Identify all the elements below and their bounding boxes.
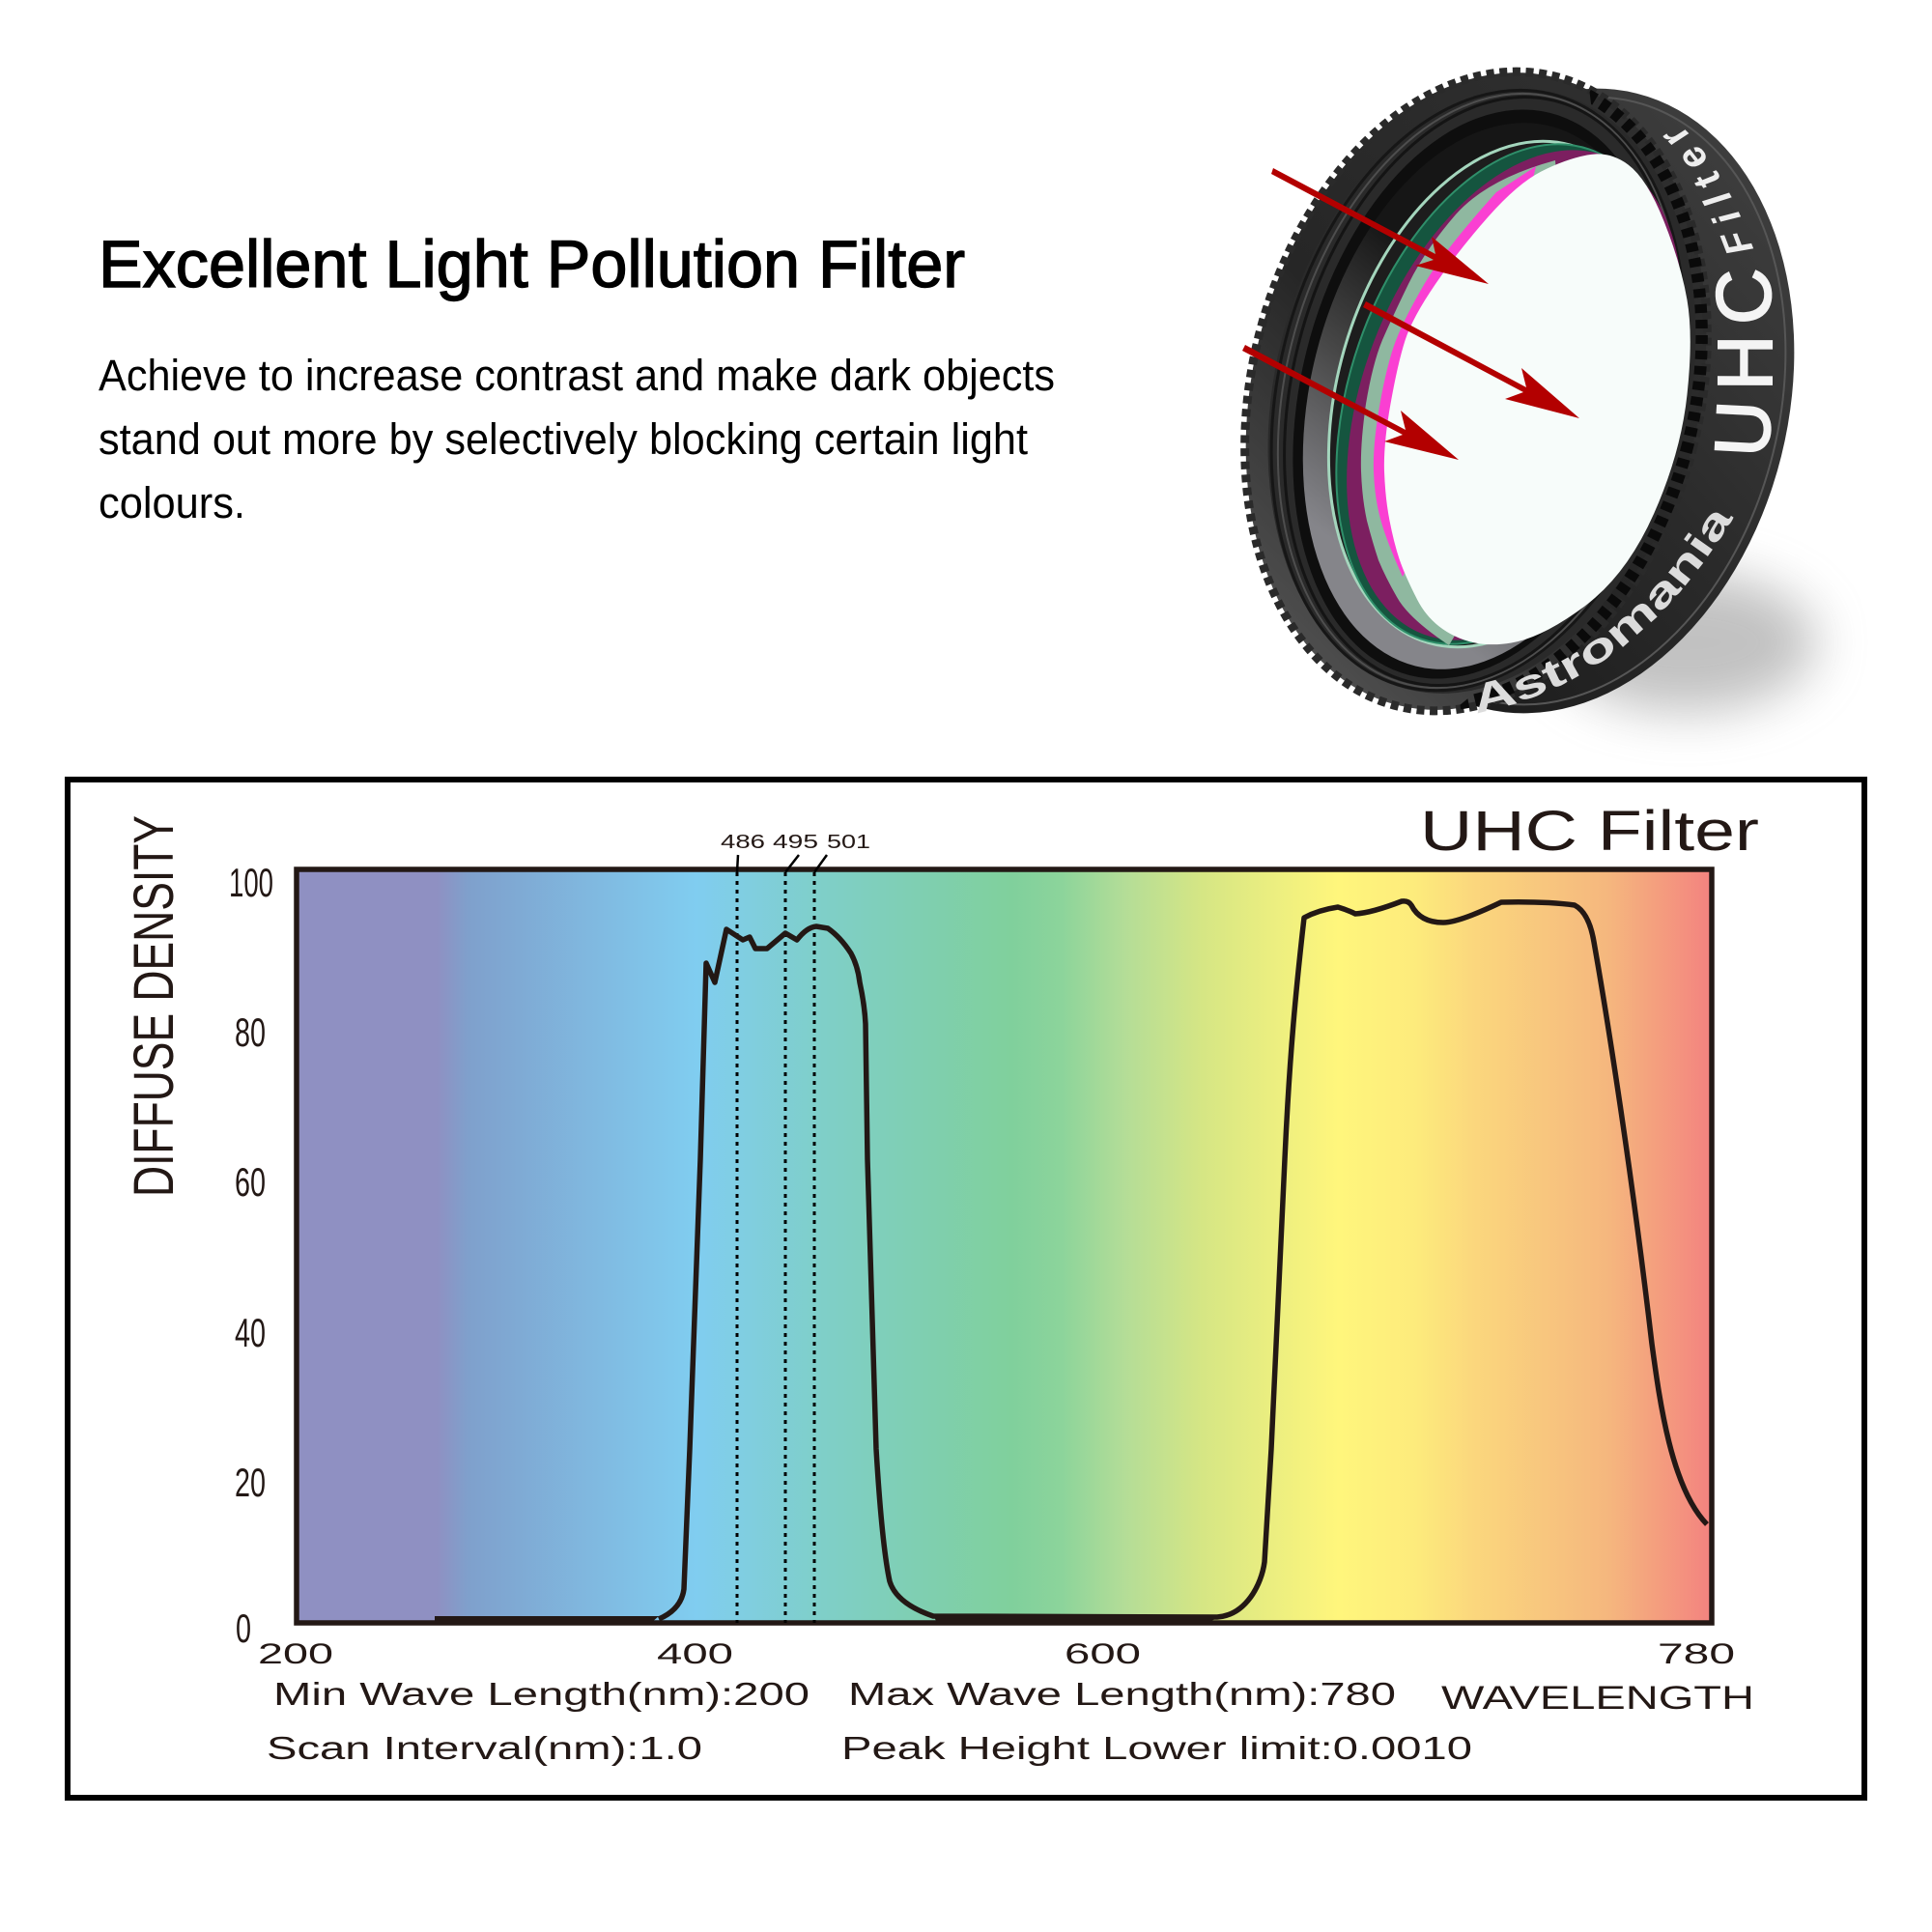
baseline thick segments <box>435 1615 1219 1623</box>
title: Excellent Light Pollution Filter <box>99 227 965 301</box>
scan parameters: Max Wave Length(nm):780 <box>848 1676 1396 1712</box>
lens filter illustration <box>1240 68 1837 738</box>
chart frame <box>68 780 1864 1798</box>
scan parameters <box>267 1676 1472 1766</box>
description text block <box>99 351 1055 527</box>
red arrow 3 <box>1242 345 1459 460</box>
knurled front ring <box>1180 22 1772 760</box>
x axis labels: 400 <box>657 1638 733 1670</box>
description text block: stand out more by selectively blocking certain light <box>99 414 1028 464</box>
wavelength marker lines <box>737 855 827 1623</box>
y axis labels: 100 <box>229 860 273 905</box>
outer barrel band <box>1263 39 1858 763</box>
transmission curve <box>659 901 1707 1619</box>
y axis title: DIFFUSE DENSITY <box>123 815 185 1197</box>
dark bore <box>1236 70 1723 719</box>
scan parameters: Peak Height Lower limit:0.0010 <box>841 1730 1472 1766</box>
y axis labels: 60 <box>235 1159 266 1205</box>
y axis labels: 20 <box>235 1460 266 1505</box>
x axis labels: 200 <box>258 1638 333 1670</box>
x axis labels <box>258 1638 1735 1670</box>
scan parameters: Scan Interval(nm):1.0 <box>267 1730 702 1766</box>
x axis title: WAVELENGTH <box>1441 1680 1754 1717</box>
marker labels: 486 <box>721 832 765 853</box>
filter glass <box>1384 154 1690 644</box>
y axis labels: 80 <box>235 1009 266 1055</box>
spectrum background and plot border <box>297 869 1712 1623</box>
band lettering: UHC: UHC <box>1714 270 1774 452</box>
band lettering: Astromania: Astromania <box>1478 512 1733 713</box>
y axis labels: 40 <box>235 1310 266 1355</box>
marker labels: 501 <box>827 832 870 853</box>
threaded inner ring <box>1207 43 1757 739</box>
grey inner barrel <box>1249 84 1717 708</box>
scan parameters: Min Wave Length(nm):200 <box>273 1676 810 1712</box>
chart heading: UHC Filter: UHC Filter <box>1420 800 1759 863</box>
x axis labels: 780 <box>1658 1638 1735 1670</box>
band lettering: Filter: Filter <box>1663 129 1754 253</box>
red arrow 2 <box>1363 301 1579 418</box>
description text block: Achieve to increase contrast and make dark objects <box>99 351 1055 400</box>
description text block: colours. <box>99 478 245 527</box>
marker labels <box>721 832 870 853</box>
red arrow 1 <box>1271 168 1489 284</box>
y axis labels <box>229 860 273 1651</box>
marker labels: 495 <box>773 832 818 853</box>
y axis labels: 0 <box>236 1605 251 1651</box>
coated glass layers <box>1273 99 1747 689</box>
lens shadow <box>1555 573 1816 712</box>
spectral transmission chart <box>297 855 1712 1623</box>
dark teeth on the front ring <box>1453 90 1708 711</box>
x axis labels: 600 <box>1065 1638 1141 1670</box>
